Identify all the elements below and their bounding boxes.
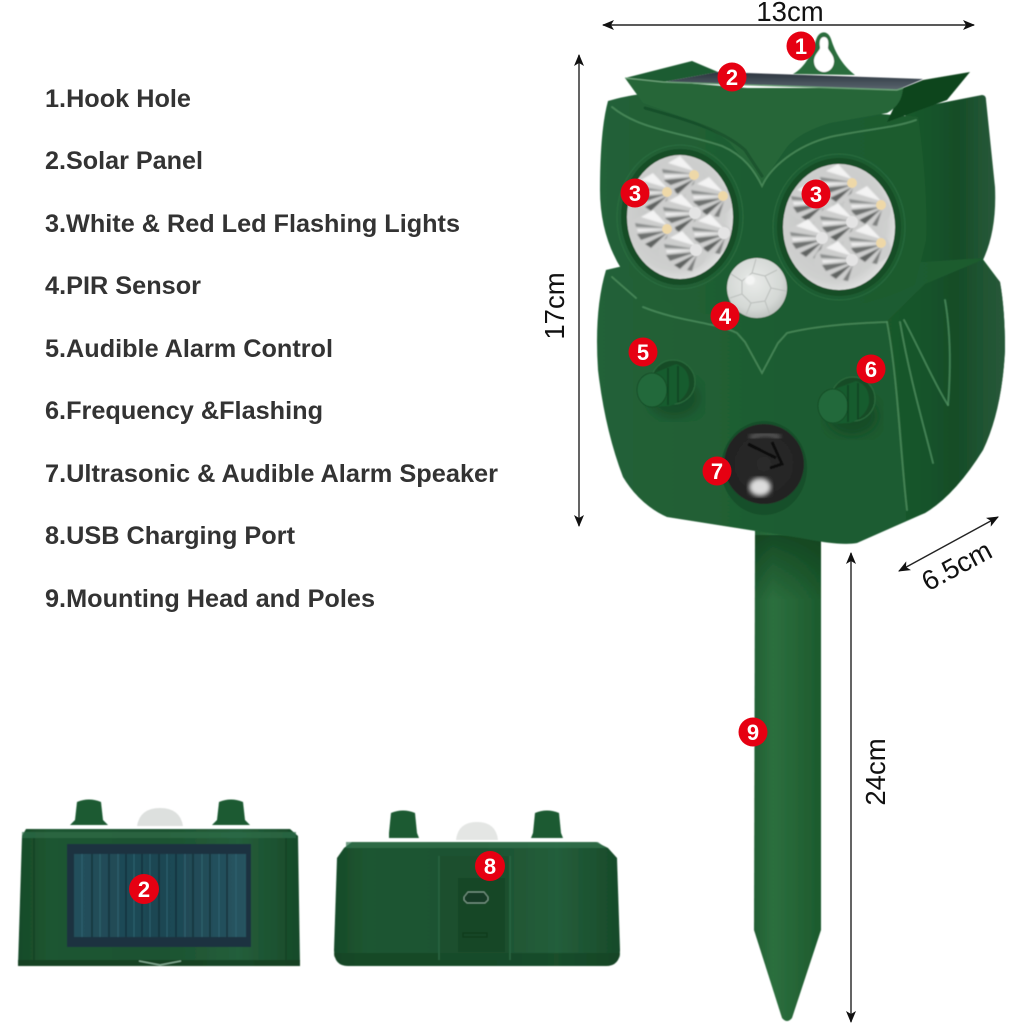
badge 3 left: 3 [629, 181, 641, 206]
badge 8: 8 [484, 854, 496, 879]
left lid wing [625, 61, 718, 82]
USB port [464, 892, 488, 903]
depth dimension 6.5cm: 6.5cm [916, 534, 997, 597]
label 2: 2.Solar Panel [45, 147, 203, 175]
side knobs [389, 810, 419, 838]
feature list [45, 85, 498, 613]
mounting pole [754, 530, 821, 1021]
pole length 24cm: 24cm [860, 738, 891, 806]
port cover [438, 856, 510, 960]
label 1: 1.Hook Hole [45, 85, 191, 113]
side PIR dome [456, 822, 498, 840]
badge 7: 7 [711, 459, 723, 484]
right lid wing underside [887, 72, 970, 122]
badge 4 [710, 302, 740, 330]
knob 6 [818, 377, 878, 436]
badge 3 left [620, 178, 650, 208]
speaker [721, 421, 807, 515]
lid front panel [625, 78, 903, 183]
badge 7 [702, 456, 732, 486]
PIR sensor [727, 258, 787, 318]
badge 2 rear: 2 [138, 877, 150, 902]
right eye LED panel [781, 164, 895, 290]
label 9: 9.Mounting Head and Poles [45, 585, 375, 613]
badge 2 top: 2 [726, 65, 738, 90]
rear PIR dome [137, 808, 183, 826]
rear body [18, 829, 300, 966]
body contour lines [612, 277, 636, 298]
label 6: 6.Frequency &Flashing [45, 397, 323, 425]
label 3: 3.White & Red Led Flashing Lights [45, 210, 460, 238]
badge 2 top [718, 62, 746, 92]
label 5: 5.Audible Alarm Control [45, 335, 333, 363]
badge 1 [786, 32, 816, 60]
badge 8 [475, 851, 505, 881]
brow lines [612, 107, 916, 186]
label 7: 7.Ultrasonic & Audible Alarm Speaker [45, 460, 498, 488]
number badges [129, 32, 886, 904]
badge 3 right: 3 [810, 182, 822, 207]
depth dimension 6.5cm [899, 517, 998, 597]
lower body [597, 258, 1005, 544]
hook hole [814, 37, 834, 72]
hook tab [793, 32, 855, 75]
badge 2 rear [129, 874, 159, 904]
side view device [334, 810, 620, 966]
side body [334, 842, 620, 966]
eye rims [621, 149, 739, 285]
badge 5: 5 [637, 340, 649, 365]
badge 9 [738, 718, 768, 746]
badge 3 right [802, 180, 830, 208]
left eye LED panel [626, 155, 737, 279]
right side wall of head [905, 95, 995, 290]
lower body side panel [886, 260, 1005, 520]
upper head [600, 94, 926, 316]
owl device [597, 32, 1005, 544]
solar panel top strip [663, 72, 923, 90]
badge 6 [856, 354, 886, 384]
label 8: 8.USB Charging Port [45, 522, 296, 550]
knob 5 [637, 360, 700, 418]
badge 9: 9 [747, 720, 759, 745]
badge 6: 6 [865, 357, 877, 382]
rear view device [18, 800, 300, 966]
rear knobs [70, 800, 108, 825]
label 4: 4.PIR Sensor [45, 272, 201, 300]
badge 1: 1 [795, 34, 807, 59]
badge 5 [628, 338, 658, 366]
height dimension 17cm: 17cm [539, 272, 570, 340]
rear solar panel [67, 844, 251, 947]
badge 4: 4 [719, 304, 732, 329]
